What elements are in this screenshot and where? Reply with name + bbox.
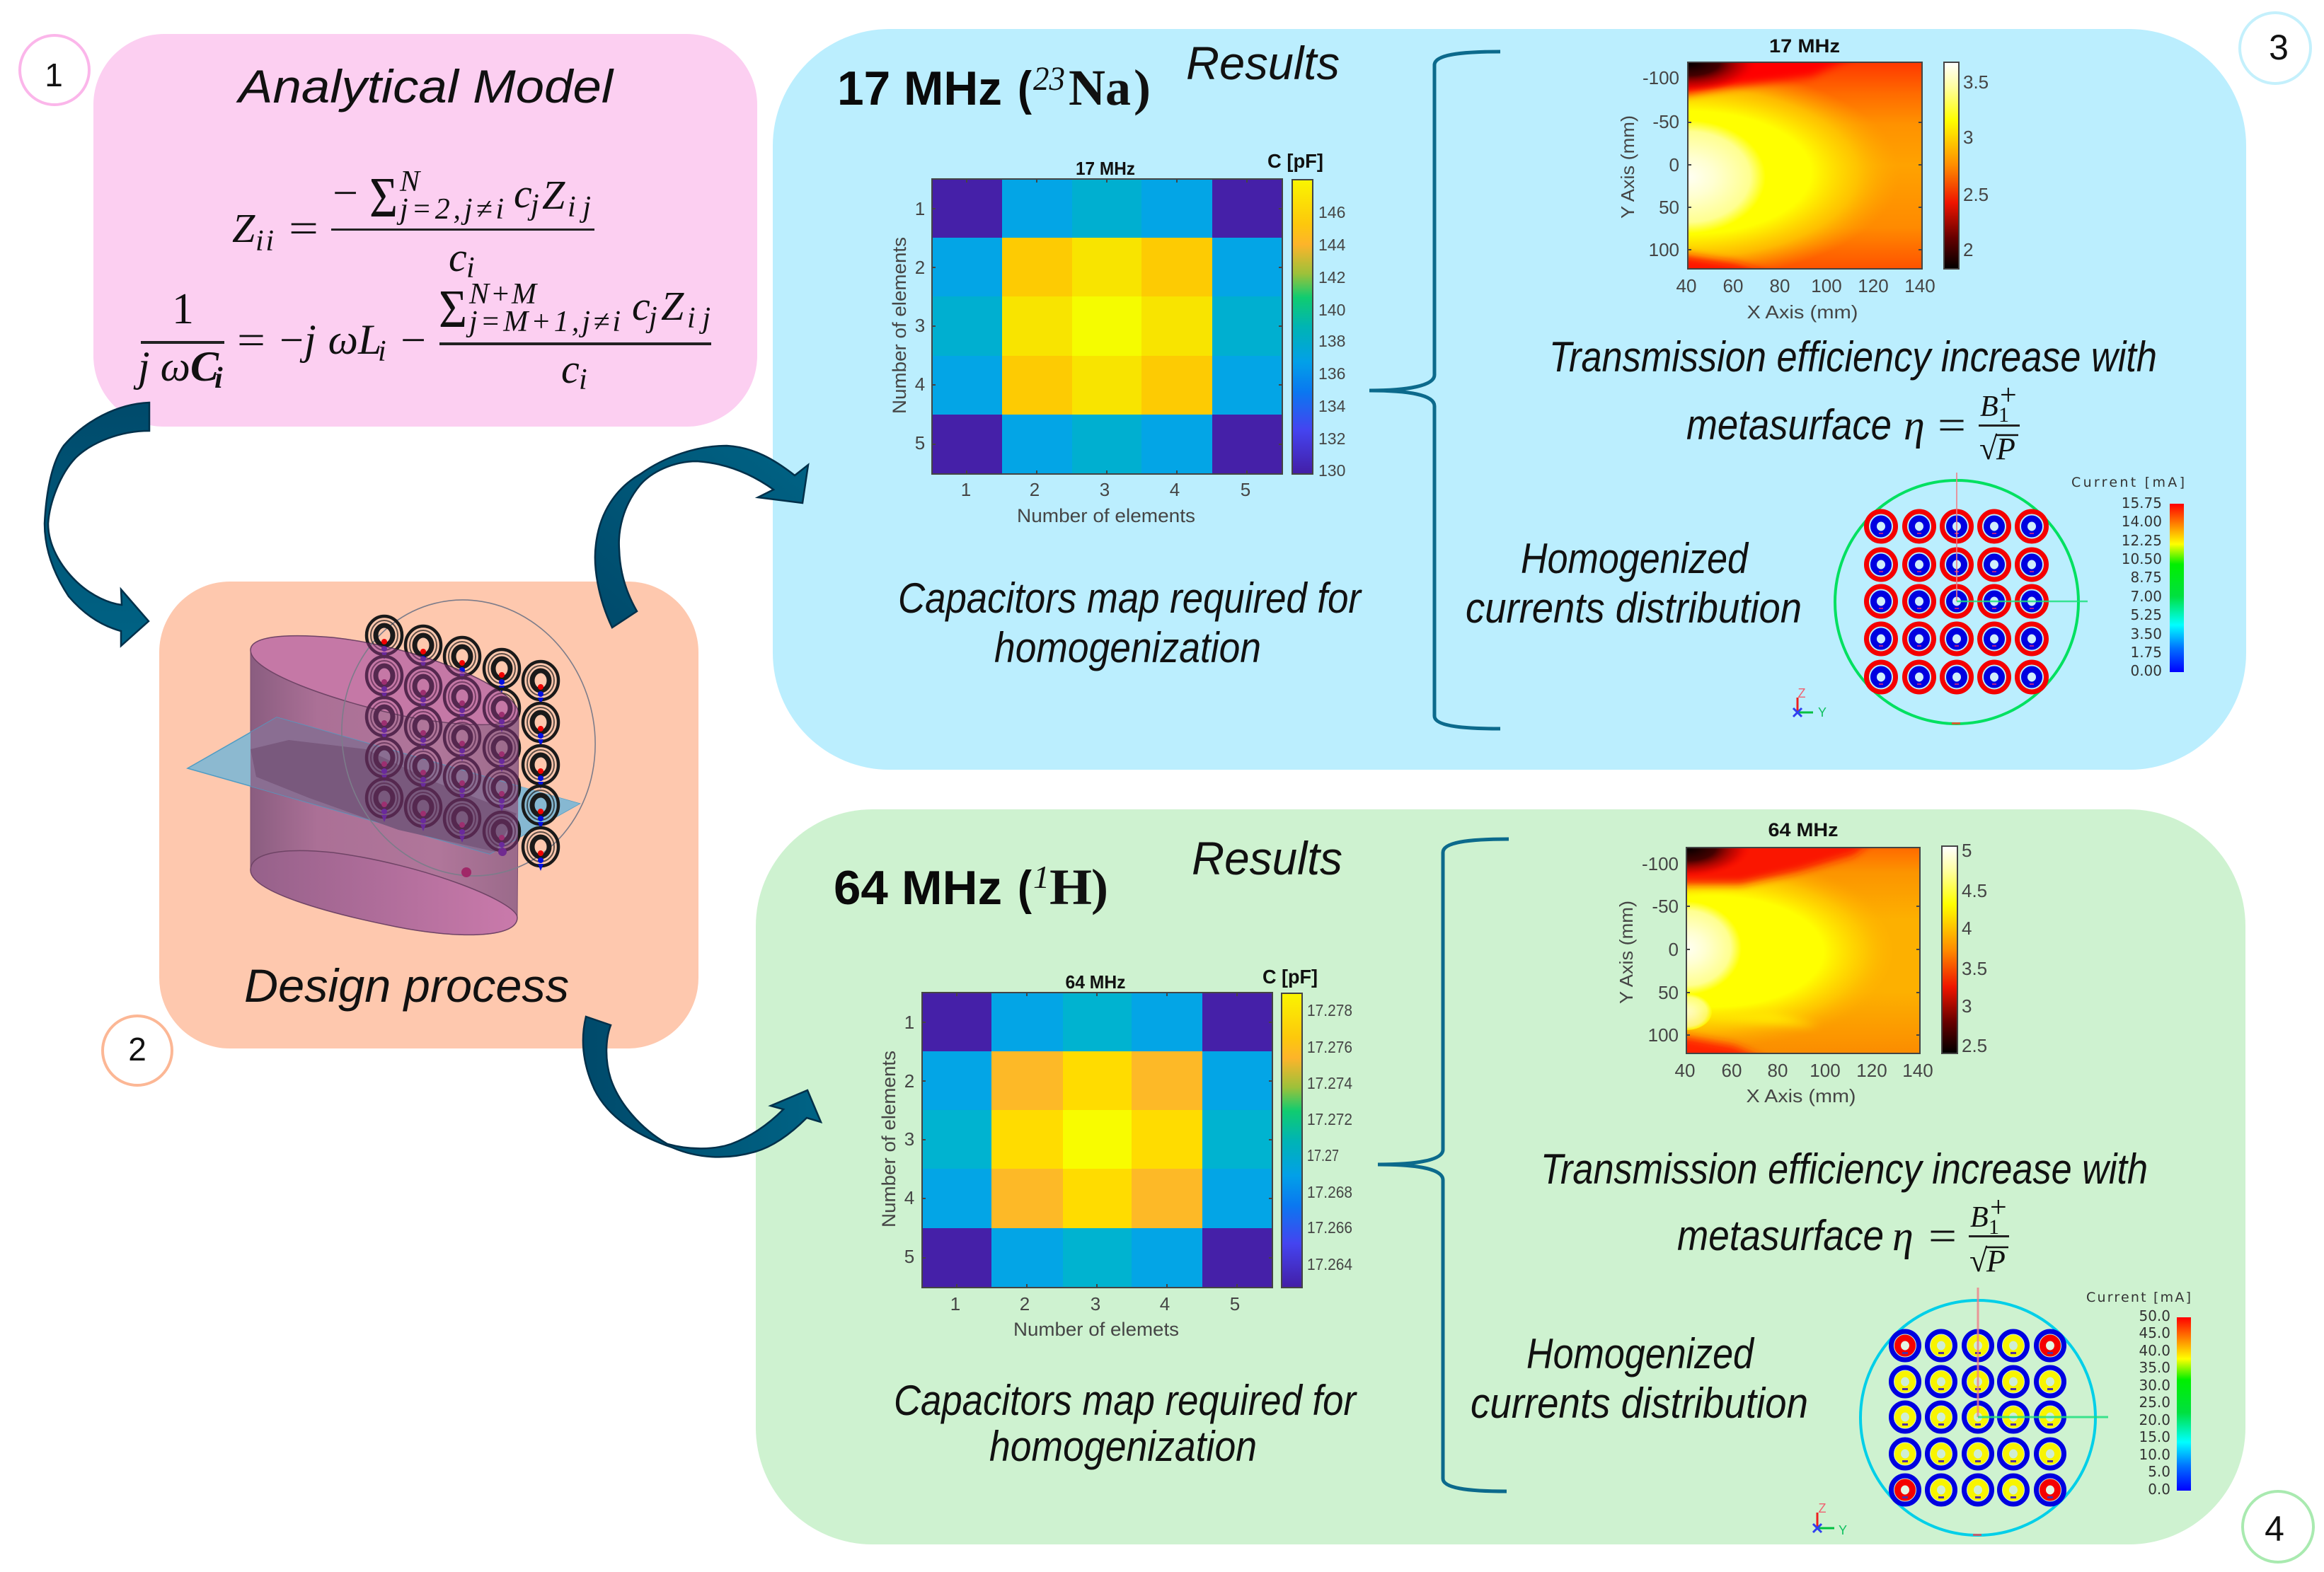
B1 field map: 2.5 [1962, 1035, 1987, 1056]
capacitor heat map: 17.27 [1307, 1146, 1339, 1164]
heading: 64 MHz proton: ( [1018, 861, 1032, 915]
equation: capacitance: i [214, 362, 223, 395]
B1 field map: 120 [1856, 1060, 1887, 1081]
capacitor heat map: 136 [1318, 364, 1345, 383]
current legend: 40.0 [2139, 1342, 2170, 1359]
current legend: 35.0 [2139, 1359, 2170, 1376]
step number 4: 4 [2265, 1509, 2284, 1549]
text: transmission efficiency [1549, 333, 2157, 466]
heading: 17 MHz sodium: 23 [1033, 60, 1065, 98]
capacitor heat map: 17.278 [1307, 1001, 1352, 1019]
text: transmission efficiency: + [2000, 379, 2017, 412]
text: transmission efficiency: P [1996, 432, 2015, 466]
equation: self impedance: j [527, 189, 539, 221]
B1 field map: 100 [1649, 239, 1679, 260]
capacitor heat map: 1 [961, 479, 971, 500]
equation: capacitance: i [579, 364, 587, 396]
equation: self impedance: = [289, 205, 318, 251]
B1 field map: 60 [1722, 1060, 1742, 1081]
brace [1378, 839, 1509, 1491]
capacitor heat map: 146 [1318, 203, 1345, 221]
capacitor heat map: Number of elements [878, 1051, 899, 1227]
text: transmission efficiency: P [1986, 1244, 2006, 1278]
current distribution simulation [1835, 473, 2088, 724]
capacitor heat map: 2 [1030, 479, 1040, 500]
capacitor heat map: 4 [1170, 479, 1180, 500]
B1 field map: 100 [1810, 1060, 1841, 1081]
current legend: 20.0 [2139, 1411, 2170, 1428]
equation: capacitance: c [561, 346, 580, 392]
current legend: 3.50 [2130, 625, 2162, 642]
caption: capacitors map: homogenization [989, 1423, 1257, 1470]
capacitor heat map: 3 [915, 315, 925, 336]
arrow: design process to 64 MHz results [583, 1017, 821, 1157]
text: transmission efficiency [1541, 1145, 2148, 1278]
B1 field map: X Axis (mm) [1747, 1085, 1856, 1106]
B1 field map: Y Axis (mm) [1617, 115, 1638, 219]
heading: 64 MHz proton: 1 [1033, 859, 1049, 895]
B1 field map: 80 [1768, 1060, 1788, 1081]
capacitor heat map: 17.274 [1307, 1074, 1352, 1092]
equation: self impedance: Z [232, 205, 255, 251]
text: transmission efficiency: metasurface [1677, 1212, 1884, 1259]
current legend: 8.75 [2130, 569, 2162, 586]
equation: capacitance: − [401, 317, 426, 363]
capacitor heat map: 142 [1318, 268, 1345, 287]
B1 field map: -100 [1643, 67, 1679, 88]
B1 field map: 40 [1675, 1060, 1695, 1081]
text: transmission efficiency: = [1938, 402, 1966, 449]
coil array inside phantom [365, 642, 519, 852]
equation: capacitance: ij [687, 302, 711, 335]
equation: capacitance: j=M+1,j≠i [466, 306, 621, 338]
phantom cylinder [251, 636, 519, 935]
capacitor heat map: Number of elements [889, 237, 910, 414]
equation: self impedance: − [333, 170, 358, 216]
step number 4 [2243, 1491, 2313, 1562]
capacitor heat map: 2 [1020, 1293, 1030, 1314]
feed dots [461, 848, 507, 877]
equation: capacitance [133, 278, 711, 396]
text: homogenized currents: currents distribution [1466, 584, 1802, 632]
text: transmission efficiency: Transmission efficiency increase with [1549, 333, 2157, 381]
text: transmission efficiency: η [1892, 1213, 1914, 1259]
current legend: 0.00 [2130, 662, 2162, 679]
heading: 64 MHz proton: 64 MHz [834, 861, 1002, 915]
capacitor heat map: 3 [1100, 479, 1110, 500]
capacitor heat map: 5 [904, 1246, 914, 1267]
B1 field map: 17 MHz [1769, 35, 1840, 57]
capacitor heat map: 5 [915, 432, 925, 453]
B1 field map: 60 [1723, 275, 1743, 296]
axis triad: Z [1797, 686, 1806, 700]
arrow: analytical model to design process [45, 403, 149, 646]
current distribution simulation [1860, 1288, 2108, 1536]
panel: 64 MHz results [756, 809, 2245, 1544]
B1 field map: -50 [1652, 111, 1679, 132]
caption: capacitors map [898, 574, 1362, 671]
B1 field map: 100 [1648, 1024, 1679, 1046]
heading: 17 MHz sodium: ) [1134, 59, 1151, 116]
B1 field map: 140 [1904, 275, 1935, 296]
heading: results: Results [1192, 832, 1342, 884]
equation: self impedance: ii [255, 225, 274, 258]
capacitor heat map: 1 [950, 1293, 960, 1314]
current legend [2071, 475, 2185, 679]
caption: capacitors map: Capacitors map required for [898, 574, 1362, 622]
text: transmission efficiency: metasurface [1686, 401, 1892, 449]
panel: analytical model [93, 34, 757, 427]
capacitor heat map: 17 MHz [1076, 158, 1135, 179]
capacitor heat map: C [pF] [1267, 150, 1323, 172]
B1 field map: X Axis (mm) [1747, 301, 1858, 323]
B1 field map: 3.5 [1963, 71, 1989, 93]
equation: capacitance: i [378, 335, 386, 368]
B1 field map: 0 [1669, 939, 1679, 960]
capacitor heat map: 4 [904, 1187, 914, 1208]
equation: self impedance: j=2,j≠i [396, 193, 504, 226]
text: homogenized currents [1466, 535, 1802, 632]
current legend: 12.25 [2122, 532, 2162, 549]
equation: capacitance: j [645, 301, 657, 334]
text: homogenized currents: currents distribution [1471, 1380, 1808, 1427]
axis triad [1793, 686, 1827, 719]
equation: capacitance: c [632, 283, 650, 329]
current legend [2086, 1290, 2191, 1498]
heading: 17 MHz sodium [837, 59, 1151, 116]
text: transmission efficiency: η [1904, 402, 1925, 449]
capacitor heat map: 138 [1318, 332, 1345, 350]
current legend: 30.0 [2139, 1377, 2170, 1394]
axis triad: Y [1839, 1523, 1847, 1537]
text: transmission efficiency: 1 [1998, 403, 2009, 427]
B1 field map: -50 [1652, 896, 1679, 917]
capacitor heat map: 1 [915, 198, 925, 219]
heading: 64 MHz proton: H [1049, 859, 1092, 915]
step number 1 [20, 35, 89, 105]
B1 field map: 140 [1902, 1060, 1933, 1081]
text: transmission efficiency: = [1928, 1213, 1957, 1259]
B1 field map: 50 [1658, 982, 1679, 1003]
B1 field map: 64 MHz [1768, 819, 1839, 840]
text: transmission efficiency: √ [1979, 430, 1998, 466]
equation: capacitance: L [357, 316, 381, 363]
capacitor heat map: 3 [1091, 1293, 1100, 1314]
equation: self impedance: Σ [369, 167, 398, 229]
capacitor heat map: C [pF] [1262, 966, 1318, 988]
capacitor heat map: 64 MHz [1066, 971, 1125, 993]
capacitor heat map: 1 [904, 1012, 914, 1033]
B1 field map: 120 [1858, 275, 1889, 296]
axis triad [1813, 1501, 1847, 1537]
text: homogenized currents: Homogenized [1521, 535, 1749, 582]
3D model: phantom, plane and coil array [186, 599, 596, 935]
B1 field map: 2.5 [1963, 184, 1989, 205]
equation: capacitance: − [280, 317, 304, 363]
coil array outside phantom [367, 616, 558, 871]
equation: self impedance: ij [568, 191, 591, 224]
equation: self impedance: N [399, 166, 421, 198]
capacitor heat map: Number of elements [1017, 505, 1195, 526]
caption: capacitors map: homogenization [994, 624, 1261, 671]
capacitor heat map: 4 [915, 374, 925, 395]
brace [1369, 52, 1500, 729]
capacitor heat map: 140 [1318, 301, 1345, 319]
caption: capacitors map: Capacitors map required for [894, 1377, 1357, 1424]
B1 field map: Y Axis (mm) [1616, 901, 1637, 1004]
text: transmission efficiency: 1 [1989, 1215, 1999, 1239]
current legend: 1.75 [2130, 644, 2162, 661]
current legend: 15.75 [2122, 495, 2162, 512]
capacitor heat map: 4 [1160, 1293, 1170, 1314]
capacitor heat map: 2 [915, 257, 925, 278]
equation: capacitance: 1 [172, 285, 194, 333]
text: homogenized currents [1471, 1330, 1808, 1427]
field plane [188, 717, 580, 854]
current legend: 5.25 [2130, 606, 2162, 623]
capacitor heat map: 130 [1318, 461, 1345, 480]
capacitor heat map: 17.268 [1307, 1183, 1352, 1201]
B1 field map: 4 [1962, 918, 1972, 939]
B1 field map: 3 [1962, 995, 1972, 1017]
equation: capacitance: Z [661, 283, 684, 329]
step number 3: 3 [2269, 28, 2289, 67]
current legend: 7.00 [2130, 588, 2162, 605]
B1 field map: 4.5 [1962, 880, 1987, 901]
B1 field map: -100 [1642, 853, 1679, 874]
B1 field map: 0 [1669, 154, 1679, 175]
heading: 17 MHz sodium: Na [1069, 59, 1131, 116]
B1 field map: 40 [1676, 275, 1696, 296]
equation: self impedance: c [514, 171, 532, 216]
equation: self impedance [232, 166, 594, 284]
capacitor heat map: 2 [904, 1070, 914, 1092]
capacitor heat map [878, 966, 1352, 1340]
heading: 17 MHz sodium: 17 MHz [837, 62, 1002, 115]
text: homogenized currents: Homogenized [1526, 1330, 1754, 1377]
B1 field map: 100 [1811, 275, 1842, 296]
capacitor heat map: 17.264 [1307, 1255, 1352, 1273]
equation: capacitance: C [190, 343, 219, 390]
equation: capacitance: jω [133, 343, 190, 390]
B1 field map: 3 [1963, 127, 1973, 148]
arrow: design process to 17 MHz results [595, 446, 808, 628]
B1 field map: 5 [1962, 840, 1972, 861]
capacitor heat map: 144 [1318, 236, 1346, 254]
current legend: 0.0 [2148, 1481, 2170, 1498]
equation: capacitance: = [237, 317, 265, 363]
current legend: 45.0 [2139, 1324, 2170, 1341]
heading: 17 MHz sodium: ( [1018, 62, 1032, 115]
B1 field map: 50 [1659, 197, 1679, 218]
text: transmission efficiency: B [1980, 391, 1998, 423]
panel: design process [159, 573, 698, 1048]
equation: self impedance: c [449, 234, 467, 280]
current legend: 50.0 [2139, 1307, 2170, 1324]
step number 3 [2240, 13, 2311, 83]
capacitor heat map: 17.272 [1307, 1110, 1352, 1128]
equation: capacitance: N+M [468, 278, 538, 311]
equation: capacitance: jω [299, 316, 358, 363]
capacitor heat map: 3 [904, 1128, 914, 1150]
heading: results: Results [1186, 37, 1340, 89]
current legend: 5.0 [2148, 1463, 2170, 1480]
equation: self impedance: i [466, 252, 475, 284]
step number 1: 1 [45, 57, 63, 93]
current legend: 15.0 [2139, 1428, 2170, 1445]
capacitor heat map: 5 [1230, 1293, 1240, 1314]
current legend: 10.0 [2139, 1446, 2170, 1463]
text: transmission efficiency: + [1990, 1191, 2007, 1224]
caption: capacitors map [894, 1377, 1357, 1470]
panel: 17 MHz results [773, 29, 2246, 770]
current legend: Current [mA] [2071, 475, 2185, 490]
capacitor heat map: Number of elemets [1013, 1319, 1179, 1340]
current legend: 25.0 [2139, 1394, 2170, 1411]
text: transmission efficiency: B [1970, 1201, 1989, 1234]
heading: 64 MHz proton [834, 859, 1108, 915]
text: transmission efficiency: Transmission efficiency increase with [1541, 1145, 2148, 1193]
B1 field map: 2 [1963, 239, 1973, 260]
current legend: Current [mA] [2086, 1290, 2191, 1305]
capacitor heat map: 134 [1318, 397, 1346, 415]
B1 field map: 3.5 [1962, 958, 1987, 979]
equation: self impedance: Z [542, 172, 565, 218]
current legend: 14.00 [2122, 513, 2162, 530]
equation: capacitance: Σ [439, 279, 467, 339]
axis triad: Y [1818, 705, 1827, 719]
capacitor heat map: 17.276 [1307, 1038, 1352, 1056]
current legend: 10.50 [2122, 550, 2162, 567]
B1 field map [1619, 823, 1986, 1106]
B1 field map [1621, 40, 1988, 323]
capacitor heat map: 132 [1318, 429, 1345, 448]
heading: analytical model: Analytical Model [236, 60, 615, 112]
heading: 64 MHz proton: ) [1091, 859, 1108, 915]
capacitor heat map: 17.266 [1307, 1218, 1352, 1237]
step number 2: 2 [128, 1031, 146, 1068]
B1 field map: 80 [1770, 275, 1790, 296]
capacitor heat map [889, 150, 1346, 526]
text: transmission efficiency: √ [1969, 1242, 1988, 1278]
metasurface outline [313, 573, 624, 903]
capacitor heat map: 5 [1241, 479, 1250, 500]
label: design process: Design process [244, 959, 569, 1012]
axis triad: Z [1819, 1501, 1826, 1515]
step number 2 [103, 1016, 172, 1085]
